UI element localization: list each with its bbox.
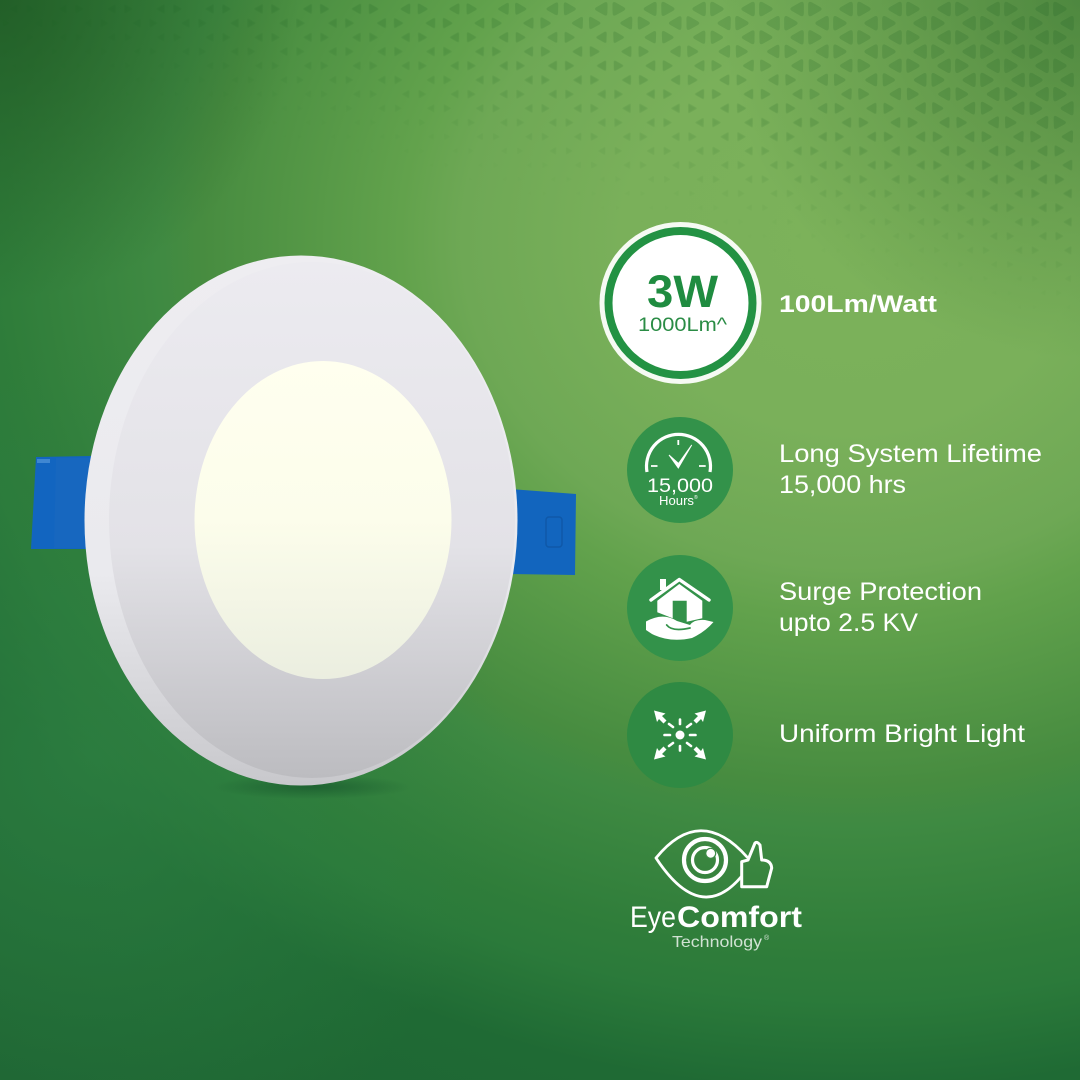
icon: eye	[656, 831, 747, 897]
housing rim	[84, 256, 518, 786]
light panel	[194, 361, 452, 679]
text: long system lifetime: Long System Lifetime	[779, 440, 1042, 468]
logo wordmark: Comfort	[677, 901, 802, 934]
icon: uniform light spread	[627, 682, 733, 788]
icon: house in hand	[627, 555, 733, 661]
left blue clip	[31, 456, 92, 549]
icon: clock 15,000 hours: 15,000	[647, 476, 713, 497]
text: long system lifetime: 15,000 hrs	[779, 471, 906, 499]
wattage: 3W	[647, 266, 719, 317]
logo wordmark	[630, 901, 802, 934]
icon: clock 15,000 hours	[627, 417, 733, 523]
lumen value: 1000Lm^	[638, 315, 727, 336]
text: uniform bright light: Uniform Bright Light	[779, 720, 1025, 748]
text: surge protection: upto 2.5 KV	[779, 609, 918, 637]
product shadow	[212, 775, 412, 799]
icon: thumbs up	[742, 842, 772, 887]
label: efficacy: 100Lm/Watt	[779, 291, 937, 318]
logo wordmark: Eye	[630, 901, 676, 934]
logo: EyeComfort Technology	[630, 831, 802, 951]
logo tagline: Technology	[672, 934, 762, 951]
text: long system lifetime	[779, 440, 1042, 499]
right blue clip	[510, 489, 576, 575]
badge: 3W 1000Lm	[600, 222, 762, 384]
logo tagline: ®	[764, 934, 770, 942]
icon: clock 15,000 hours: Hours	[659, 493, 694, 508]
text: surge protection	[779, 578, 982, 637]
housing face	[109, 262, 515, 778]
product: round LED downlight	[31, 256, 576, 799]
icon: clock 15,000 hours: ®	[694, 494, 698, 501]
text: surge protection: Surge Protection	[779, 578, 982, 606]
